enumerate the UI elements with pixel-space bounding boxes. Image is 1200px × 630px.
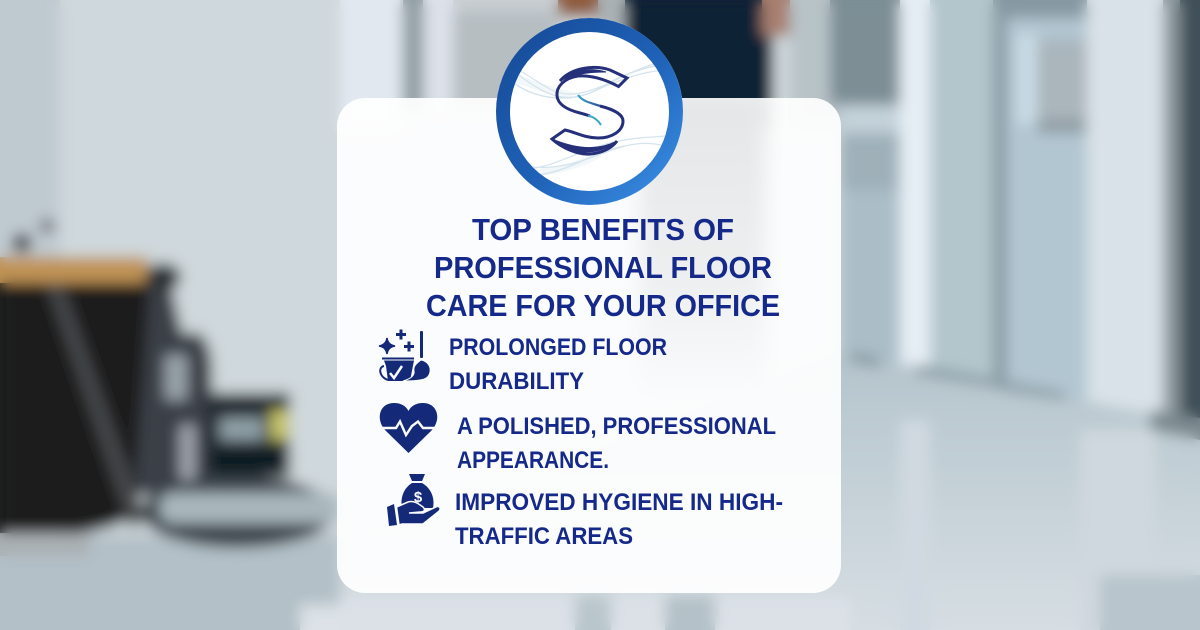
benefit 3: IMPROVED HYGIENE IN HIGH- <box>455 489 783 516</box>
logo badge <box>496 18 683 205</box>
benefit 2: A POLISHED, PROFESSIONAL <box>457 413 776 440</box>
benefit 2: APPEARANCE. <box>457 447 609 474</box>
benefit 3: TRAFFIC AREAS <box>455 523 633 550</box>
title: PROFESSIONAL FLOOR <box>434 250 772 285</box>
logo letter S <box>552 67 627 154</box>
benefit 1: DURABILITY <box>449 368 584 395</box>
title: CARE FOR YOUR OFFICE <box>426 288 780 323</box>
icon: hand holding money bag <box>387 474 440 526</box>
title <box>426 212 780 323</box>
benefit 2 <box>380 403 776 474</box>
benefit 3 <box>387 474 783 550</box>
icon: heart with pulse line <box>380 403 438 453</box>
icon: hand holding money bag: $ <box>414 489 423 506</box>
panel: frosted white card <box>337 98 841 593</box>
icon: cleaning sparkle bucket and broom <box>379 330 430 381</box>
logo waves <box>515 62 665 176</box>
title: TOP BENEFITS OF <box>472 212 734 247</box>
benefit 1 <box>379 330 667 395</box>
benefit 1: PROLONGED FLOOR <box>449 334 667 361</box>
